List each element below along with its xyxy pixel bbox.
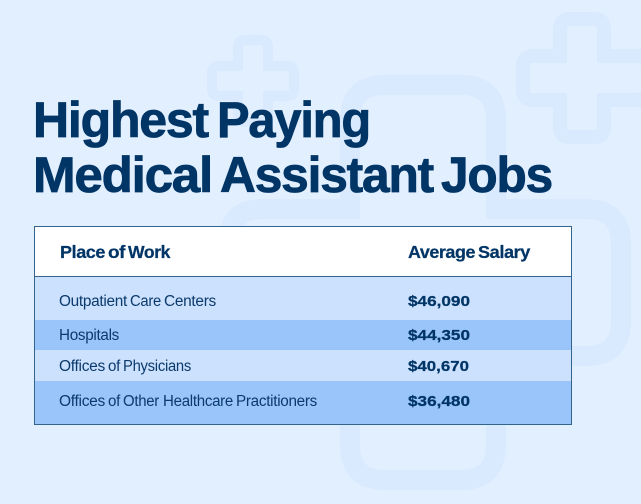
title: Assistant (220, 147, 435, 203)
row: Offices of Other Healthcare Practitioners: Other (123, 393, 159, 410)
row: Outpatient Care Centers: Outpatient (59, 293, 128, 310)
row: Offices of Physicians: Physicians (123, 358, 192, 375)
row: Offices of Physicians (34, 350, 572, 381)
table header row: Place (60, 242, 106, 262)
row: Offices of Physicians: of (108, 358, 121, 375)
row: Offices of Other Healthcare Practitioners: $36,480 (408, 393, 470, 410)
row: Outpatient Care Centers: Centers (164, 293, 217, 310)
icon: small medical cross (212, 40, 294, 122)
icon: large medical cross (228, 85, 621, 480)
row: Offices of Other Healthcare Practitioners: Offices (59, 393, 106, 410)
row: Hospitals: $44,350 (408, 327, 470, 344)
title: Paying (217, 92, 370, 148)
row: Hospitals (34, 320, 572, 350)
row: Outpatient Care Centers: $46,090 (408, 293, 470, 310)
row: Hospitals: Hospitals (59, 327, 120, 344)
title: Jobs (441, 147, 552, 203)
table header row: Work (128, 242, 171, 262)
row: Offices of Other Healthcare Practitioners (34, 381, 572, 425)
row: Offices of Physicians: $40,670 (408, 358, 469, 375)
row: Offices of Other Healthcare Practitioners: Healthcare (163, 393, 233, 410)
row: Offices of Physicians: Offices (59, 358, 106, 375)
title: Highest (33, 92, 210, 148)
title (33, 92, 552, 203)
table header row: Average (408, 242, 476, 262)
row: Offices of Other Healthcare Practitioners: Practitioners (236, 393, 318, 410)
salary table (34, 226, 572, 425)
row: Outpatient Care Centers (34, 277, 572, 320)
table header row (34, 226, 572, 276)
row: Outpatient Care Centers: Care (130, 293, 161, 310)
title: Medical (33, 147, 212, 203)
table header row: of (108, 242, 126, 262)
icon: top-right medical cross (523, 19, 641, 137)
table header row: Salary (478, 242, 531, 262)
row: Offices of Other Healthcare Practitioners: of (108, 393, 121, 410)
